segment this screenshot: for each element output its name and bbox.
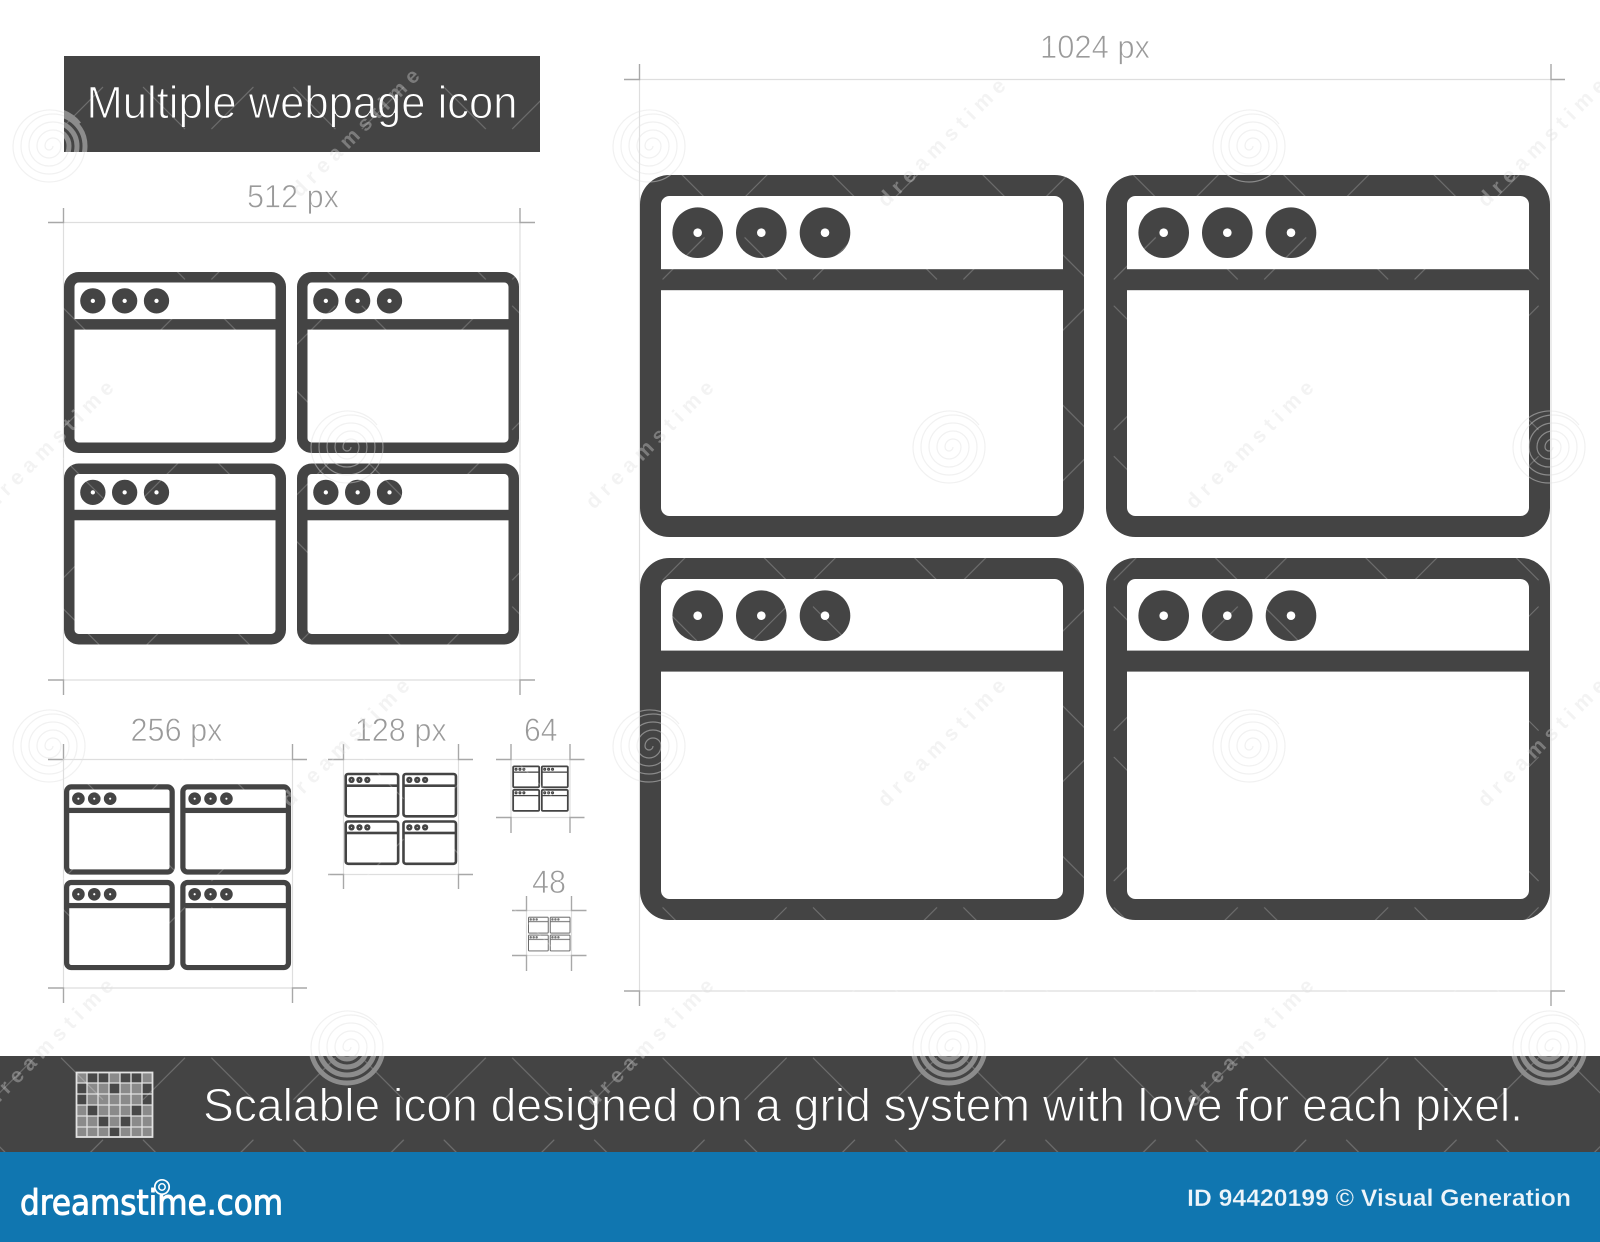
- watermark: dreamstime text: dreamstime: [873, 74, 1011, 212]
- size guide: 128 px: 128 px: [355, 712, 447, 748]
- size guide: 512 px: 512 px: [247, 178, 339, 214]
- icon: multiple webpage 128 px: [346, 774, 456, 864]
- watermark: dreamstime text: dreamstime: [581, 974, 719, 1112]
- watermark: dreamstime text: dreamstime: [873, 674, 1011, 812]
- size guide: 256 px: [48, 712, 307, 1003]
- title banner: Multiple webpage icon: [86, 77, 518, 128]
- size guide: 256 px: 256 px: [130, 712, 222, 748]
- watermark: dreamstime text: dreamstime: [581, 376, 719, 514]
- icon: multiple webpage 48 px: [528, 917, 570, 951]
- title banner: [64, 56, 540, 152]
- logo: dreamstime.com: dreamstime.com: [20, 1184, 283, 1224]
- size guide: 64: 64: [524, 712, 558, 748]
- watermark: dreamstime text: dreamstime: [287, 64, 425, 202]
- size guide: 48: 48: [532, 864, 566, 900]
- icon: pixel grid: [76, 1072, 153, 1138]
- icon: multiple webpage 1024 px: [650, 186, 1540, 910]
- size guide: 64: [496, 712, 584, 833]
- footer band: Scalable icon designed on a grid system with love for each pixel.: [203, 1079, 1523, 1131]
- brand bar: [0, 1152, 1600, 1242]
- icon: multiple webpage 256 px: [66, 787, 289, 968]
- watermark: dreamstime text: dreamstime: [1181, 974, 1319, 1112]
- size guide: 128 px: [328, 712, 473, 889]
- watermark: dreamstime text: dreamstime: [1181, 376, 1319, 514]
- size guide: 48: [512, 864, 586, 971]
- image credit: ID 94420199 © Visual Generation: [1187, 1185, 1571, 1212]
- watermark: spirals: [13, 110, 1585, 1083]
- size guide: 1024 px: 1024 px: [1040, 29, 1150, 65]
- footer band: [0, 1056, 1600, 1152]
- watermark: spirals over dark bands: [13, 110, 1585, 1083]
- icon: multiple webpage 512 px: [69, 277, 514, 639]
- icon: multiple webpage 64 px: [513, 766, 568, 811]
- watermark: dreamstime text: dreamstime: [277, 674, 415, 812]
- size guide: 512 px: [48, 178, 535, 695]
